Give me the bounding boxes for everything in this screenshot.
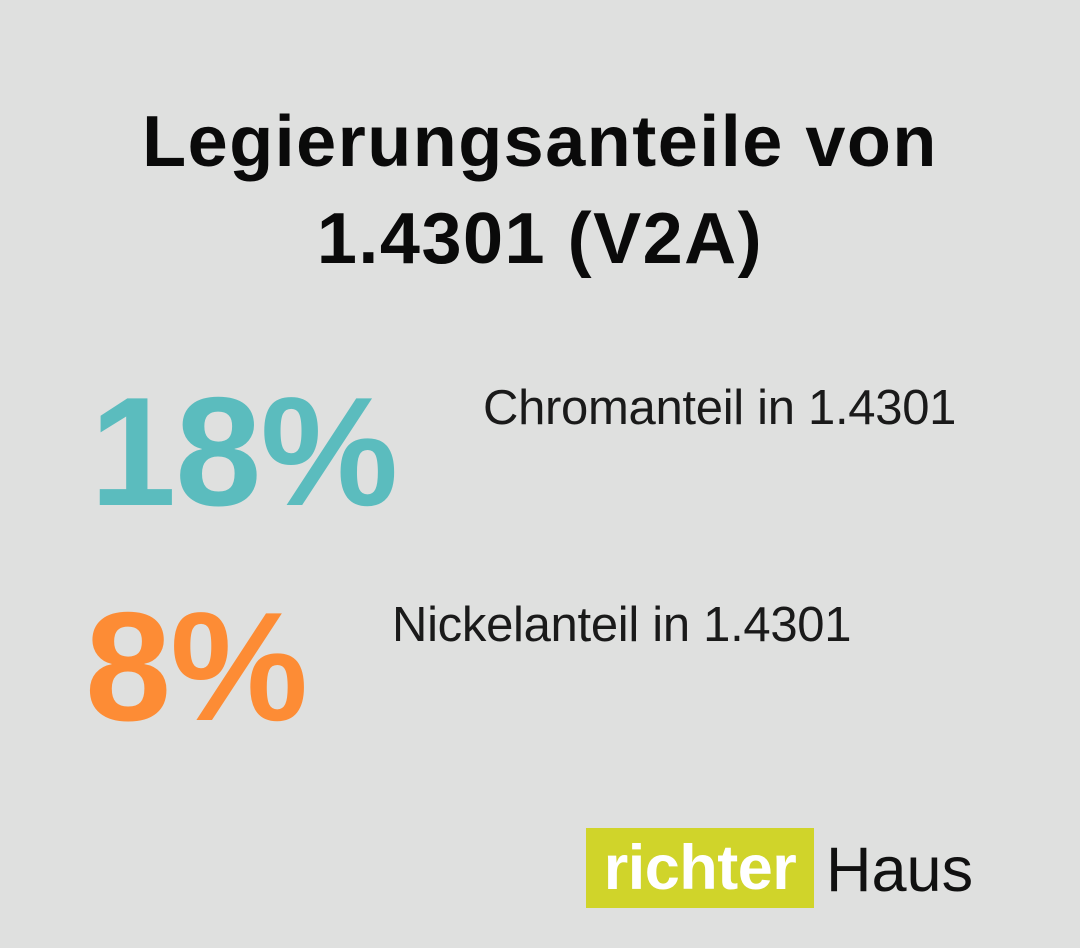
- logo: Haus text: Haus: [826, 835, 973, 905]
- stat: nickel percentage: 8%: [85, 580, 307, 753]
- logo: richter box: richter: [604, 833, 796, 903]
- label: nickel: Nickelanteil in 1.4301: [392, 598, 851, 652]
- title: Legierungsanteile von: [142, 102, 938, 182]
- stat: chromium percentage: 18%: [90, 365, 397, 538]
- label: chromium: Chromanteil in 1.4301: [483, 381, 956, 435]
- logo: [586, 828, 973, 908]
- title: [142, 102, 938, 279]
- title: 1.4301 (V2A): [317, 199, 763, 279]
